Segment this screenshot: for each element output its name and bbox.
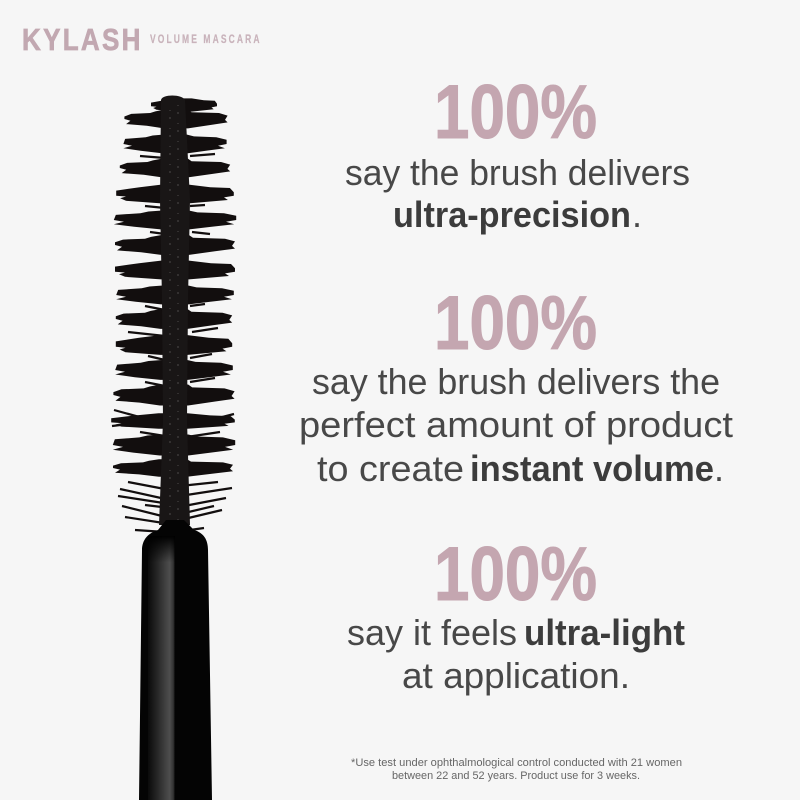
statement: instant volume (470, 448, 714, 489)
brand name: KYLASH (22, 23, 140, 58)
statement: ultra-light (524, 612, 685, 653)
icon: mascara wand (111, 96, 236, 800)
statement (347, 612, 685, 696)
percentage: 100% (434, 70, 597, 155)
core texture (170, 105, 178, 520)
statement: at application. (402, 655, 630, 696)
stat: ultra-light feel (347, 532, 685, 696)
percentage: 100% (434, 281, 597, 366)
footnote: between 22 and 52 years. Product use for 3 weeks. (392, 770, 640, 782)
footnote: *Use test under ophthalmological control conducted with 21 women (351, 757, 682, 769)
loose bristle strands (112, 154, 234, 532)
bottle neck and handle (139, 520, 212, 800)
brush core (159, 96, 190, 525)
stat: brush precision (345, 70, 690, 235)
statement: say the brush delivers the (312, 361, 720, 402)
product name: VOLUME MASCARA (150, 34, 260, 46)
brand header (22, 23, 260, 58)
statement: to create (317, 448, 464, 489)
statement: perfect amount of product (299, 404, 733, 445)
statement: say the brush delivers (345, 152, 690, 193)
stat: product amount (299, 281, 733, 489)
statement: say it feels (347, 612, 517, 653)
statement: ultra-precision (393, 194, 631, 235)
statement (299, 361, 733, 489)
statement: . (632, 194, 642, 235)
brush bristles (111, 98, 236, 477)
statement (345, 152, 690, 235)
handle highlight (148, 536, 175, 800)
statement: . (714, 448, 724, 489)
percentage: 100% (434, 532, 597, 617)
footnote (351, 757, 682, 782)
